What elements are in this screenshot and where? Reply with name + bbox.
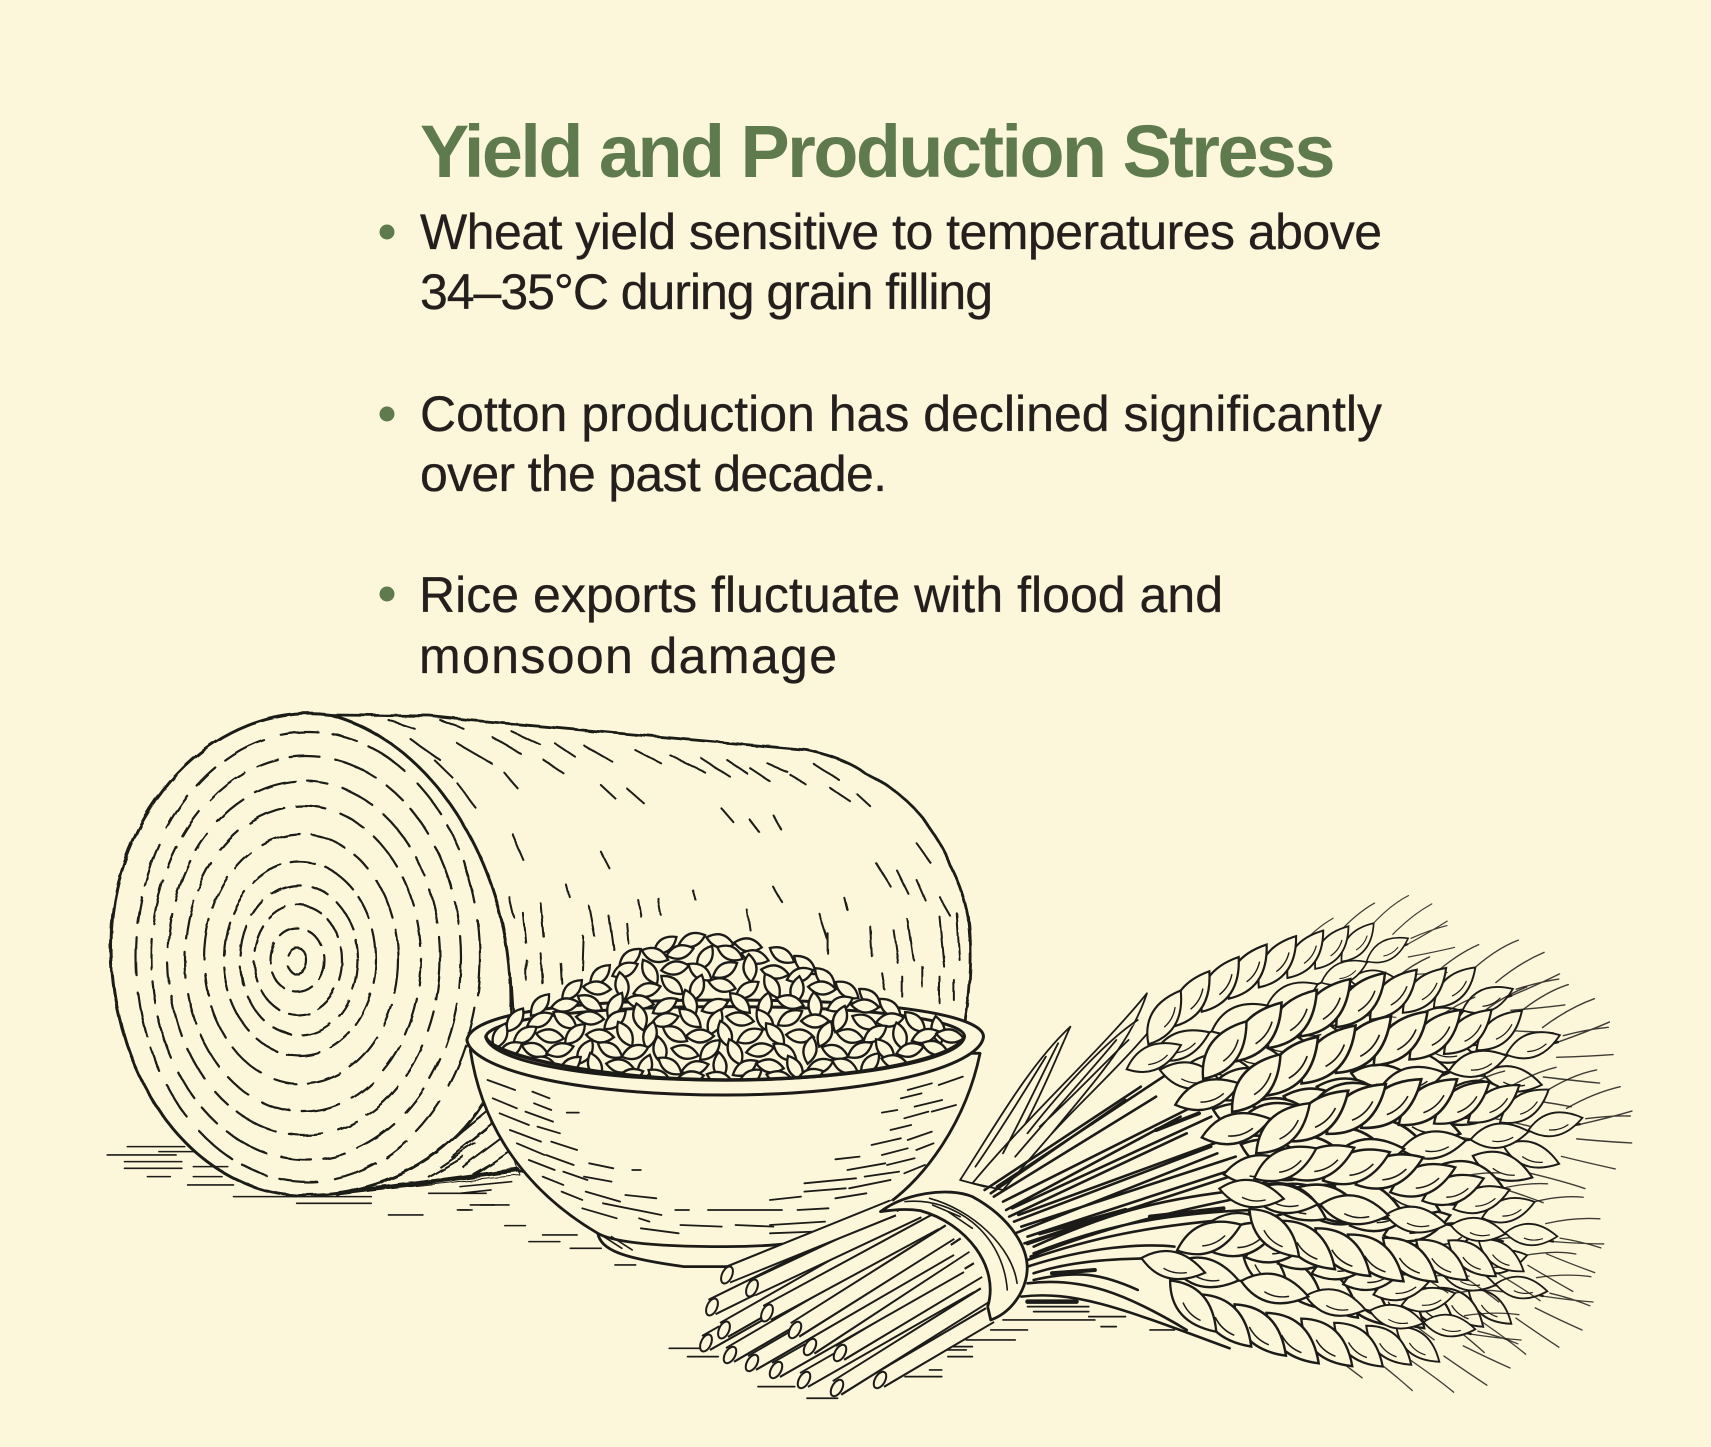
cut stems <box>698 1207 992 1398</box>
bowl body and foot <box>460 1050 980 1267</box>
bullet 1: wheat yield <box>380 204 1382 320</box>
title: Yield and Production Stress <box>420 110 1333 193</box>
bowl inner rim line <box>486 1037 964 1080</box>
bowl rim <box>467 1000 983 1095</box>
icon: bowl of rice <box>460 929 983 1267</box>
bullet 1: wheat yield: 34–35°C during grain filling <box>420 264 993 320</box>
bullet 1: wheat yield: Wheat yield sensitive to temperatures above <box>420 204 1382 260</box>
icon: wheat sheaf <box>669 863 1644 1419</box>
icon: hay bale <box>111 714 970 1195</box>
wheat ears <box>1099 863 1644 1419</box>
bullet list <box>380 204 1382 684</box>
ground hatching left <box>107 1147 509 1215</box>
binding band <box>880 1192 1027 1320</box>
bullet 3: rice exports: Rice exports fluctuate with flood and <box>419 567 1223 623</box>
bullet 2: cotton production: over the past decade. <box>420 446 887 502</box>
bullet 3: rice exports <box>380 567 1223 684</box>
leaf blades <box>960 993 1168 1190</box>
hay front face <box>111 714 511 1195</box>
bullet 3: rice exports: monsoon damage <box>419 628 837 684</box>
wheat stalks above tie <box>985 1073 1254 1348</box>
ground hatching under sheaf <box>669 1302 1174 1398</box>
hay body <box>331 715 970 1193</box>
bowl hatching <box>488 1077 963 1233</box>
illustration: hay, bowl of rice and wheat sheaf <box>107 714 1644 1419</box>
rice grains <box>491 932 963 1078</box>
bullet 2: cotton production: Cotton production has declined significantly <box>420 386 1382 442</box>
bullet 2: cotton production <box>380 386 1382 502</box>
